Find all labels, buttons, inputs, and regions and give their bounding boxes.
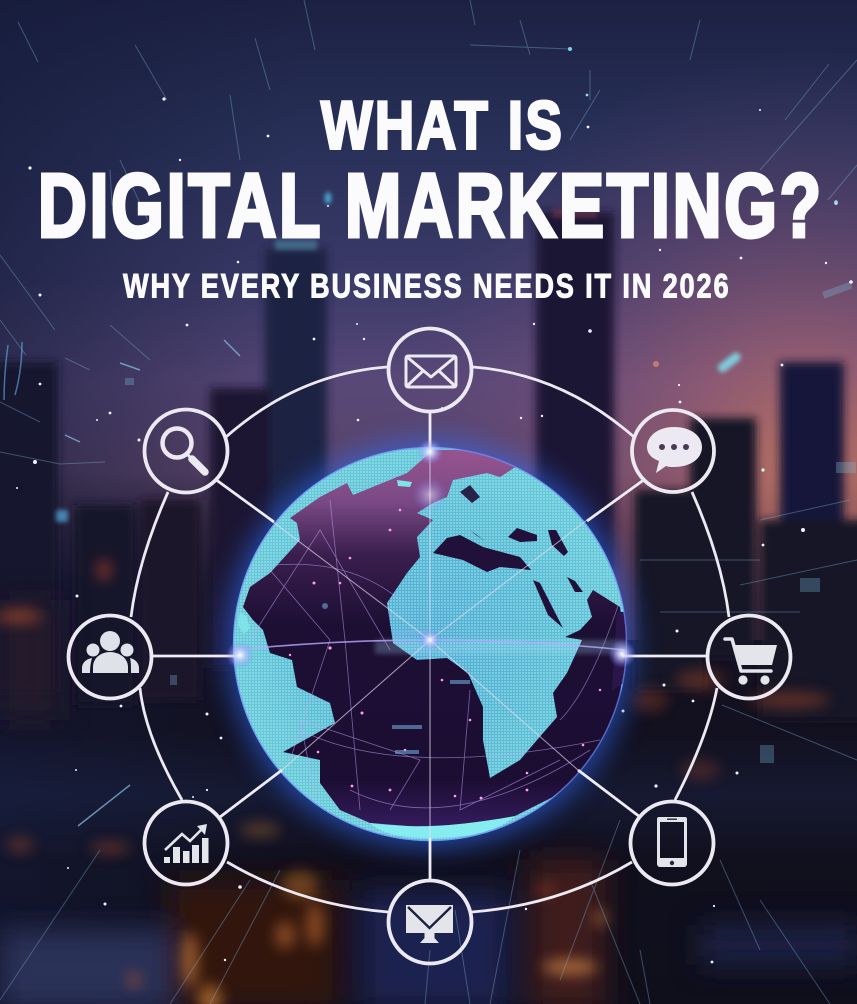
- network lines over the globe: [240, 500, 620, 820]
- spoke sparkles: [226, 439, 636, 669]
- connector lines across the globe: [273, 452, 587, 838]
- globe rim: [234, 448, 626, 840]
- title: Digital Marketing?: DIGITAL MARKETING?: [38, 155, 821, 256]
- title: What Is: WHAT IS: [321, 88, 562, 164]
- spokes from globe to icons: [152, 412, 707, 880]
- equator glow band: [235, 640, 630, 654]
- icon: magnifying glass (search): [144, 410, 228, 492]
- icon: audience (people): [68, 616, 152, 698]
- icon: shopping cart: [708, 616, 790, 698]
- Mediterranean, Black Sea, Caspian, Red Sea: [433, 485, 630, 690]
- globe body with continents: [230, 445, 640, 845]
- subtitle: WHY EVERY BUSINESS NEEDS IT IN 2026: [123, 267, 729, 305]
- icon: smartphone: [630, 802, 714, 884]
- globe: [227, 441, 640, 847]
- icon: email on monitor: [388, 880, 472, 964]
- icon: growth chart: [144, 802, 228, 884]
- icon: speech bubble (social): [632, 410, 714, 492]
- ring connecting the icons: [131, 367, 729, 912]
- bright southern crescent: [370, 816, 515, 838]
- globe glow: [227, 441, 633, 847]
- icon: envelope (email): [388, 328, 472, 412]
- Greenland and northern land: [238, 480, 412, 634]
